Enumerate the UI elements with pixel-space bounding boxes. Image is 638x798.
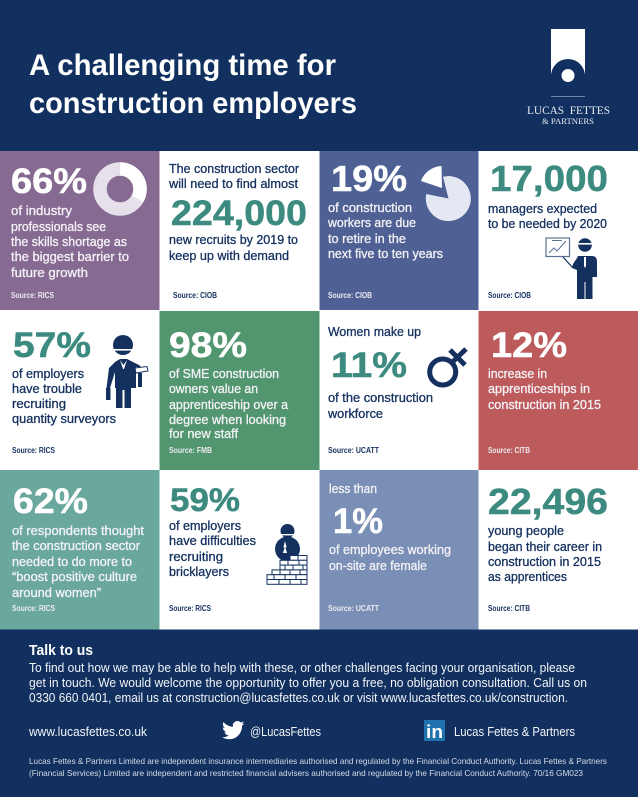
text: surveyors: quantity surveyors xyxy=(12,411,116,426)
text: increase xyxy=(488,366,601,412)
text: workforce xyxy=(327,390,433,421)
text: retiring: workers are due xyxy=(327,215,416,230)
text: culture: around women” xyxy=(12,585,101,600)
panel: 57% quantity surveyors xyxy=(0,310,160,470)
text: culture xyxy=(12,523,144,600)
text: apprenticeship: for new staff xyxy=(169,426,238,441)
panel: 66% skills shortage xyxy=(0,151,160,310)
stat: 57%: 57% xyxy=(13,326,91,365)
text: legal disclaimer: (Financial Services) Limited are independent and restricted financial advisers authorised and regulated by the Financial Conduct Authority. 70/16 GM023 xyxy=(29,768,583,778)
text: skills shortage: of industry xyxy=(11,203,72,218)
text: skills shortage: future growth xyxy=(11,265,88,280)
panel: 224,000 new recruits xyxy=(160,151,320,310)
source: Source: CIOB xyxy=(173,291,217,300)
text: intro: The construction sector xyxy=(169,161,300,176)
stat: 22,496: 22,496 xyxy=(488,481,608,522)
icon: bricklayer at wall xyxy=(267,524,307,584)
panel: 98% apprenticeship value xyxy=(160,311,320,470)
title xyxy=(29,49,357,120)
text: skills shortage: the biggest barrier to xyxy=(11,249,129,264)
panel: 22,496 apprentices xyxy=(478,470,638,630)
stat: 59%: 59% xyxy=(170,482,240,518)
text: apprentices: young people xyxy=(488,523,564,538)
text: culture: “boost positive culture xyxy=(12,569,137,584)
stat: 98%: 98% xyxy=(169,326,247,365)
source: Source: CITB xyxy=(488,446,530,455)
text: increase: increase in xyxy=(488,366,547,381)
source: Source: UCATT xyxy=(328,446,379,455)
stat: 17,000: 17,000 xyxy=(490,158,608,199)
icon: manager pointing at chart xyxy=(546,238,597,299)
text: apprenticeship: owners value an xyxy=(169,381,258,396)
text: recruits: new recruits by 2019 to xyxy=(169,232,298,247)
icon: linkedin: in xyxy=(426,722,443,742)
stat: 12%: 12% xyxy=(491,326,567,365)
text: culture: the construction sector xyxy=(12,538,141,553)
text: managers xyxy=(488,201,607,231)
stat: 66%: 66% xyxy=(11,162,87,201)
text: apprentices: as apprentices xyxy=(488,569,567,584)
text: legal disclaimer xyxy=(29,756,607,778)
text: intro: Women make up xyxy=(328,324,421,339)
text: legal disclaimer: Lucas Fettes & Partners Limited are independent insurance intermediaries authorised and regulated by the Financial Conduct Authority. Lucas Fettes & Partners xyxy=(29,756,607,766)
panel: 12% apprenticeships increase xyxy=(478,311,638,470)
text: recruits xyxy=(169,232,298,263)
text: skills shortage: professionals see xyxy=(11,219,106,234)
text: bricklayers: recruiting xyxy=(169,549,223,564)
panel: 1% female on-site xyxy=(320,470,478,630)
text: managers: managers expected xyxy=(488,201,597,216)
text: apprentices: began their career in xyxy=(488,539,602,554)
icon: twitter xyxy=(222,721,244,739)
text: retiring: of construction xyxy=(328,200,412,215)
text: managers: to be needed by 2020 xyxy=(488,216,607,231)
text: apprenticeship: apprenticeship over a xyxy=(169,397,289,412)
text: apprentices: construction in 2015 xyxy=(488,554,601,569)
text: bricklayers: have difficulties xyxy=(169,533,256,548)
text: recruits: keep up with demand xyxy=(169,248,289,263)
text: apprenticeship xyxy=(169,366,289,441)
link: linkedin name: Lucas Fettes & Partners xyxy=(454,724,575,739)
text: apprenticeship: of SME construction xyxy=(169,366,279,381)
panel: 62% positive culture xyxy=(0,470,160,630)
text: contact paragraph xyxy=(29,660,587,705)
stat: 11%: 11% xyxy=(331,346,407,385)
logo: Lucas Fettes & Partners: & PARTNERS xyxy=(542,117,594,126)
text: culture: needed to do more to xyxy=(12,554,132,569)
text: less than: less than xyxy=(329,481,377,496)
stat: 1%: 1% xyxy=(333,502,383,541)
icon: linkedin xyxy=(424,720,445,742)
text: apprentices xyxy=(488,523,602,584)
source: Source: CIOB xyxy=(488,291,531,300)
panel: footer xyxy=(0,630,638,797)
chart: pie 19% xyxy=(421,166,471,221)
text: surveyors: of employers xyxy=(12,366,84,381)
text: surveyors: recruiting xyxy=(12,396,66,411)
text: retiring xyxy=(327,200,443,261)
link: website: www.lucasfettes.co.uk xyxy=(28,724,147,739)
text: culture: of respondents thought xyxy=(12,523,144,538)
source: Source: RICS xyxy=(169,604,212,613)
text: skills shortage: the skills shortage as xyxy=(11,234,127,249)
logo: Lucas Fettes & Partners: LUCAS FETTES xyxy=(527,103,610,117)
title: construction employers xyxy=(29,87,357,120)
panel: 17,000 managers xyxy=(478,151,638,310)
text: on-site xyxy=(329,542,451,573)
source: Source: FMB xyxy=(169,446,212,455)
text: on-site: of employees working xyxy=(329,542,451,557)
stat: 62%: 62% xyxy=(13,482,88,521)
panel: 59% bricklayers xyxy=(160,470,320,630)
source: Source: CITB xyxy=(488,604,530,613)
text: retiring: to retire in the xyxy=(328,231,406,246)
source: Source: RICS xyxy=(12,446,56,455)
text: workforce: of the construction xyxy=(328,390,433,405)
source: Source: CIOB xyxy=(328,291,372,300)
text: increase: apprenticeships in xyxy=(488,381,590,396)
stat: 224,000: 224,000 xyxy=(171,194,307,233)
text: on-site: on-site are female xyxy=(329,558,427,573)
link: twitter handle: @LucasFettes xyxy=(250,724,321,739)
text: contact paragraph: To find out how we may be able to help with these, or other challenges facing your organisation, please xyxy=(29,660,575,675)
source: Source: RICS xyxy=(12,604,56,613)
text: bricklayers: bricklayers xyxy=(169,564,229,579)
text: bricklayers xyxy=(169,518,256,579)
text: apprenticeship: degree when looking xyxy=(169,412,286,427)
icon: gender symbol xyxy=(430,349,466,385)
text: intro xyxy=(168,161,300,191)
chart: donut 66% xyxy=(100,162,147,209)
source: Source: UCATT xyxy=(328,604,379,613)
icon: surveyor with plans xyxy=(106,335,148,408)
text: skills shortage xyxy=(11,203,129,280)
text: surveyors: have trouble xyxy=(12,381,82,396)
title: A challenging time for xyxy=(29,49,336,82)
text: intro: will need to find almost xyxy=(168,176,298,191)
source: Source: RICS xyxy=(11,291,55,300)
stat: 19%: 19% xyxy=(331,158,407,199)
text: workforce: workforce xyxy=(327,406,383,421)
text: increase: construction in 2015 xyxy=(488,397,601,412)
text: bricklayers: of employers xyxy=(169,518,241,533)
panel: header xyxy=(0,0,638,151)
text: surveyors xyxy=(12,366,116,426)
panel: women 11% xyxy=(320,310,478,470)
text: retiring: next five to ten years xyxy=(328,246,443,261)
heading: talk to us: Talk to us xyxy=(29,642,93,659)
panel: 19% retiring xyxy=(320,151,478,310)
logo: Lucas Fettes & Partners xyxy=(527,29,610,126)
text: contact paragraph: get in touch. We would welcome the opportunity to offer you a free, no obligation consultation. Call us on xyxy=(29,675,587,690)
text: contact paragraph: 0330 660 0401, email us at construction@lucasfettes.co.uk or visit www.lucasfettes.co.uk/construction. xyxy=(29,690,568,705)
